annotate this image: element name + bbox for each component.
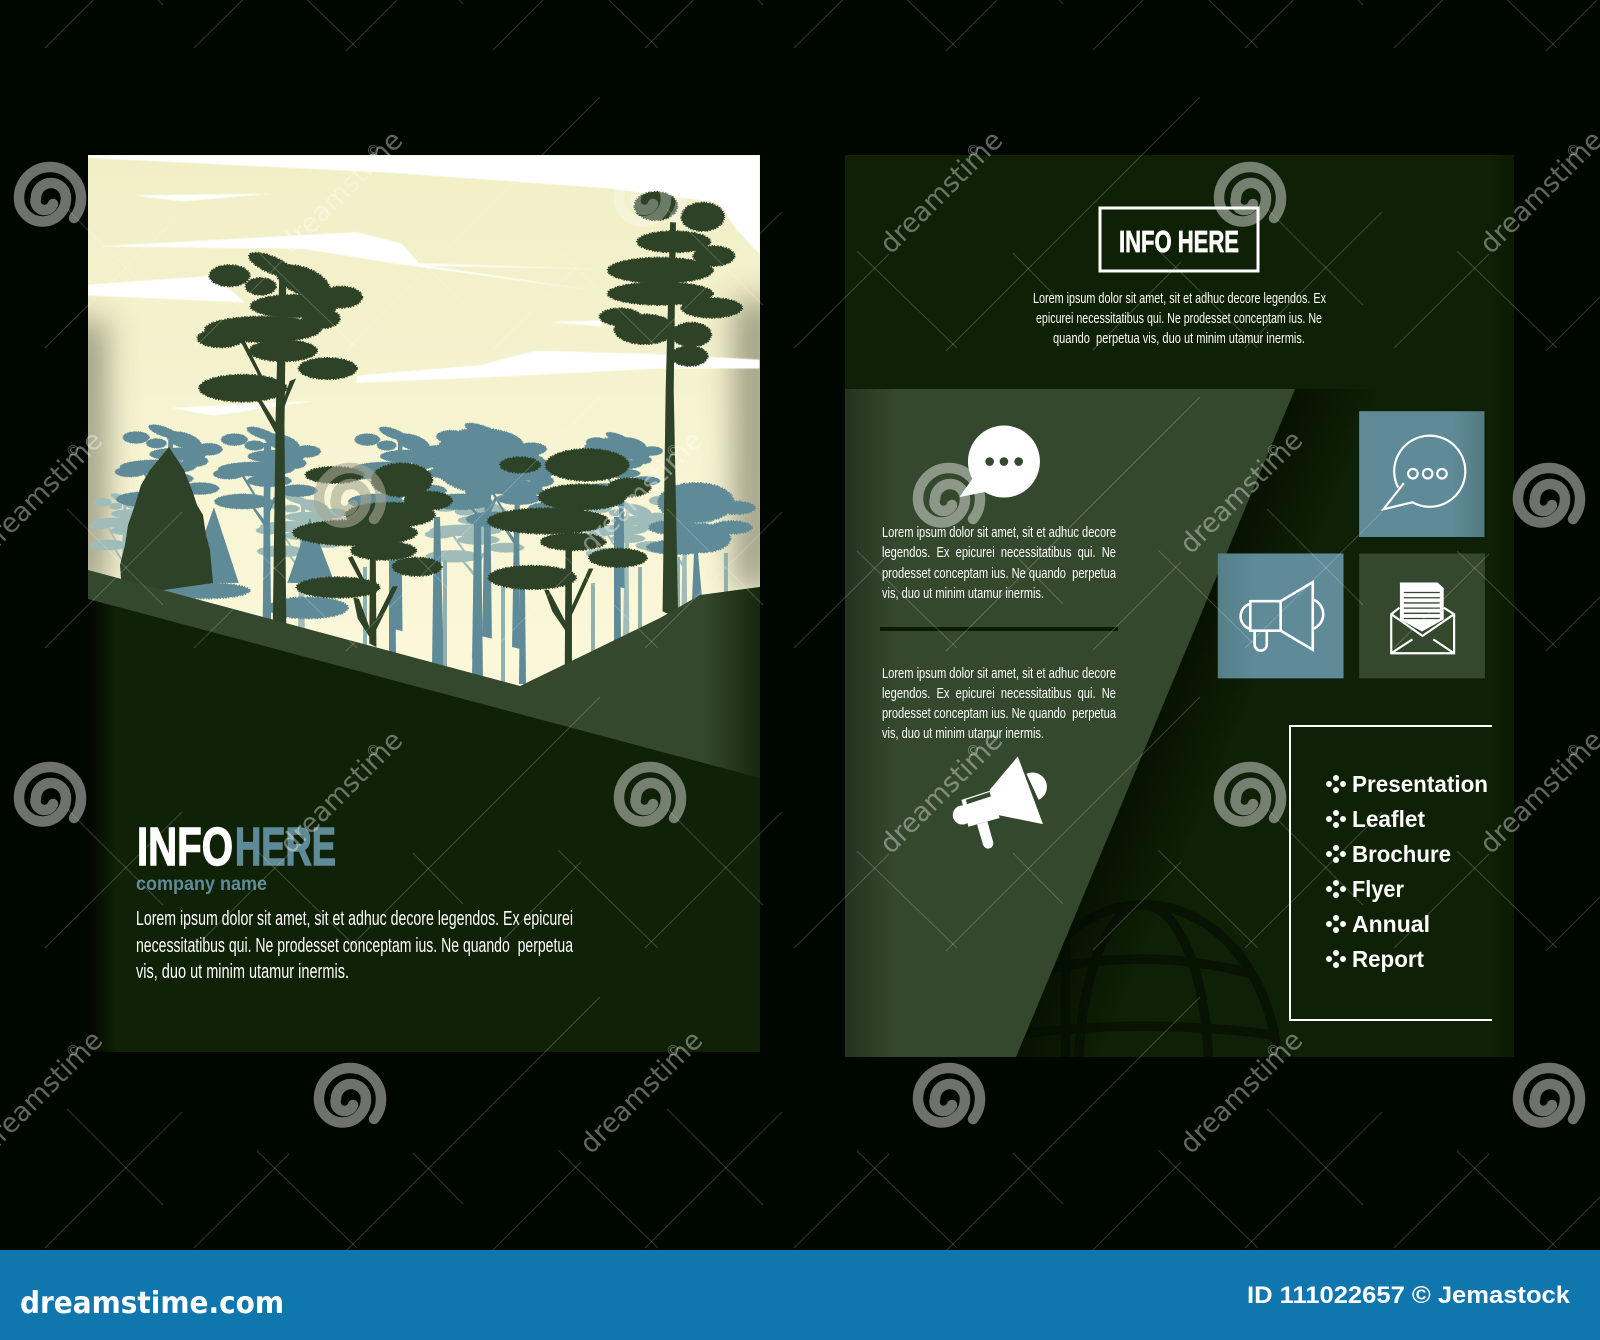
icon: solid chat bubble [959,426,1040,498]
blue and pale trunks [263,443,728,684]
mid pine centre-left [293,463,452,647]
blue pine trees [115,420,755,649]
panel: right brochure page [845,155,1514,1057]
list items: Annual [1352,911,1430,937]
watermark layer: dreamstime [1174,425,1309,560]
list items: Presentation [1352,771,1488,797]
mid pine centre-right [488,449,650,665]
text block: first paragraph [882,524,1116,602]
watermark layer: © [666,1043,680,1059]
green triangle panel [845,389,1295,1057]
right edge shading [1490,155,1514,1057]
text block: second paragraph: prodesset conceptam ius. Ne quando perpetua [882,705,1116,722]
tile: megaphone outline [1218,553,1344,678]
footer credit: ID 111022657 © Jemastock [1247,1282,1571,1309]
front hill [88,599,760,1052]
globe watermark [1061,900,1282,1057]
sky edge shading [68,300,775,590]
watermark layer: dreamstime [574,1025,709,1160]
text block: first paragraph: vis, duo ut minim utamur inermis. [882,585,1044,602]
tall pine right [600,192,742,619]
footer logo: dreamstime.com [20,1286,284,1321]
watermark layer: © [366,743,380,759]
text block: second paragraph: vis, duo ut minim utamur inermis. [882,725,1044,742]
watermark layer: © [966,143,980,159]
text block: cover paragraph: vis, duo ut minim utamur inermis. [136,961,349,983]
list items: Report [1352,946,1424,972]
middle hill [88,570,760,778]
tile: envelope with letter [1359,553,1485,678]
watermark layer: dreamstime [874,125,1009,260]
watermark layer: © [366,143,380,159]
info here badge: INFO HERE [1119,224,1239,259]
sky [88,155,760,715]
watermark layer: © [1566,743,1580,759]
far pale trees [89,489,725,660]
watermark layer: © [66,1043,80,1059]
middle hill right shading [713,587,760,778]
text block: cover paragraph [136,908,574,983]
watermark layer: dreamstime [874,725,1009,860]
front hill left shading [88,599,108,1052]
list items: Leaflet [1352,806,1425,832]
text block: first paragraph: prodesset conceptam ius. Ne quando perpetua [882,565,1116,582]
watermark layer: © [1266,443,1280,459]
watermark layer: dreamstime [274,725,409,860]
text block: intro paragraph: quando perpetua vis, duo ut minim utamur inermis. [1053,330,1305,347]
icon: solid megaphone [953,756,1047,849]
watermark layer: © [1266,1043,1280,1059]
text block: first paragraph: Lorem ipsum dolor sit amet, sit et adhuc decore [882,524,1116,541]
text block: intro paragraph: epicurei necessitatibus qui. Ne prodesset conceptam ius. Ne [1036,310,1322,327]
text block: cover paragraph: necessitatibus qui. Ne prodesset conceptam ius. Ne quando perpetua [136,935,574,957]
watermark layer: dreamstime [574,425,709,560]
text block: first paragraph: legendos. Ex epicurei necessitatibus qui. Ne [882,544,1116,561]
watermark layer: © [66,443,80,459]
text block: second paragraph: legendos. Ex epicurei necessitatibus qui. Ne [882,685,1116,702]
tall pine left [197,248,362,624]
list items [1352,771,1488,972]
company name: company name [136,874,267,895]
info here badge [1100,208,1258,271]
heading: INFO HERE [137,817,336,877]
divider [880,627,1118,631]
watermark layer: © [1566,143,1580,159]
heading: INFO HERE: HERE [235,817,336,877]
tile: chat outline [1359,411,1484,537]
clouds [88,155,759,416]
list items: Flyer [1352,876,1404,902]
text block: second paragraph: Lorem ipsum dolor sit amet, sit et adhuc decore [882,665,1116,682]
list items: Brochure [1352,841,1451,867]
triangle left shading [845,389,876,1057]
shadow beside triangle [1016,389,1332,1057]
list box [1290,726,1492,1020]
dark conifer [120,447,213,592]
list bullets [1326,775,1346,968]
text block: cover paragraph: Lorem ipsum dolor sit amet, sit et adhuc decore legendos. Ex epicurei [136,908,573,930]
text block: intro paragraph: Lorem ipsum dolor sit amet, sit et adhuc decore legendos. Ex [1033,290,1326,307]
footer band [0,1250,1600,1340]
text block: intro paragraph [1033,290,1326,347]
watermark layer: dreamstime [274,125,409,260]
panel background [845,155,1514,1057]
watermark layer: © [666,443,680,459]
heading: INFO HERE: INFO [137,817,233,877]
panel: left brochure cover [68,155,775,1052]
text block: second paragraph [882,665,1116,742]
watermark layer: dreamstime [1174,1025,1309,1160]
watermark layer: © [966,743,980,759]
